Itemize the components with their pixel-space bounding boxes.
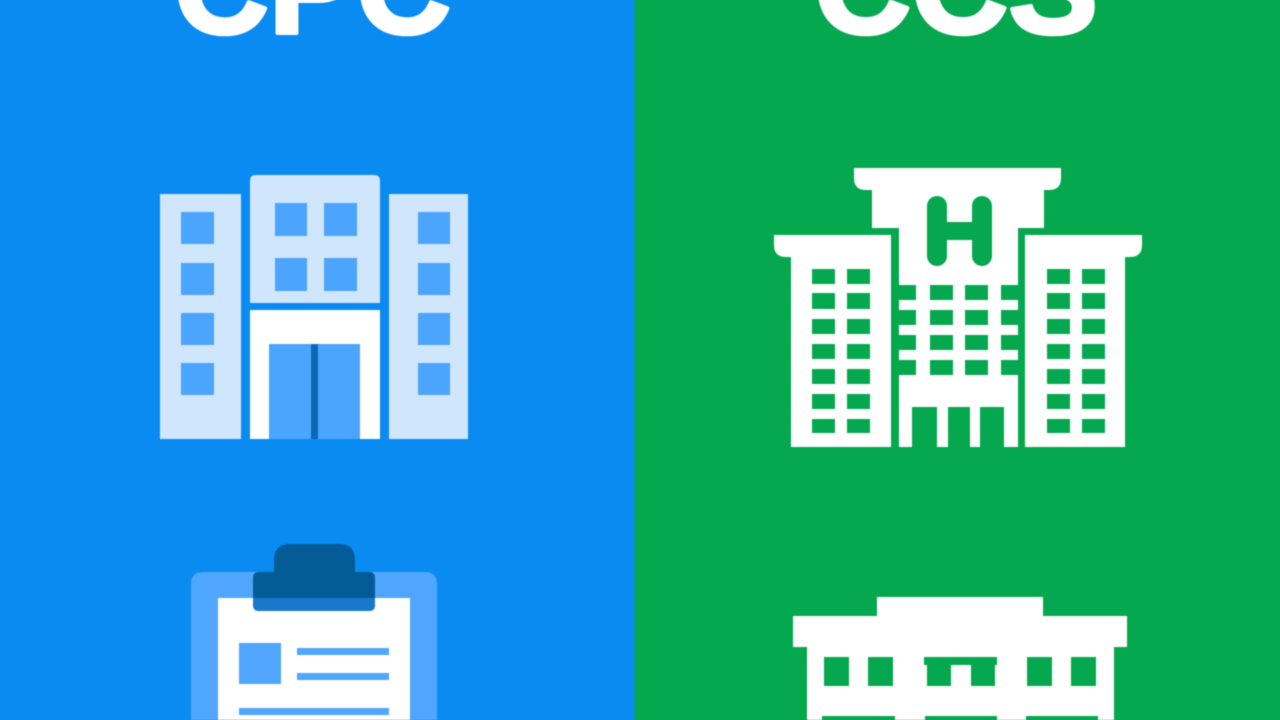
icon: hospital: [774, 168, 1142, 447]
panel: CCS green side: [634, 0, 1280, 720]
icon: clipboard: [191, 544, 437, 720]
panel: CPC blue side: [0, 0, 634, 720]
icon: office building: [160, 175, 468, 439]
icon: clinic building: [793, 597, 1127, 720]
icon: letter H: [927, 196, 992, 266]
